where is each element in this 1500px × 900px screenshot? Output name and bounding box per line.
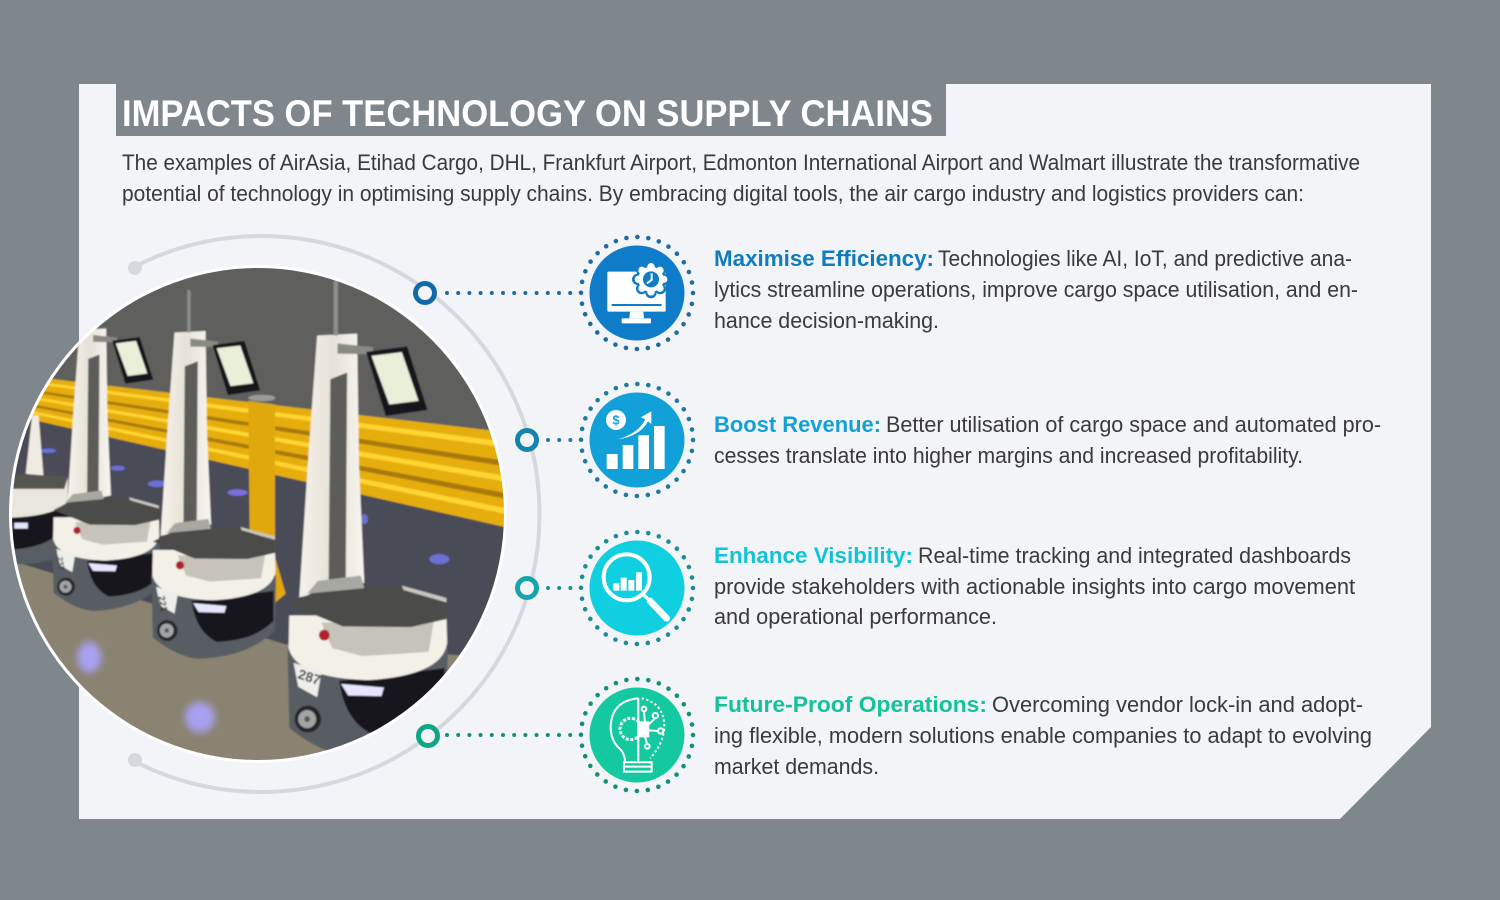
icon: tech light bulb	[581, 679, 693, 791]
text: boost revenue	[714, 412, 1381, 468]
infographic canvas	[9, 84, 1431, 819]
text: boost revenue: Boost Revenue:	[714, 412, 881, 437]
text: maximise efficiency	[714, 246, 1358, 333]
connector 4	[418, 726, 580, 746]
text: maximise efficiency: Maximise Efficiency:	[714, 246, 934, 271]
icon: magnifier	[581, 532, 693, 644]
connector 1	[416, 284, 580, 302]
text: future-proof operations: market demands.	[714, 754, 879, 779]
text: boost revenue: Better utilisation of cargo space and automated pro-	[886, 412, 1381, 437]
text: enhance visibility	[714, 543, 1356, 629]
icon: monitor with gear	[581, 237, 693, 349]
intro text: potential of technology in optimising supply chains. By embracing digital tools, the air cargo industry and logistics providers can:	[122, 181, 1304, 206]
text: future-proof operations: Overcoming vendor lock-in and adopt-	[992, 692, 1363, 717]
text: enhance visibility: and operational performance.	[714, 604, 997, 629]
panel	[79, 84, 1431, 819]
title: IMPACTS OF TECHNOLOGY ON SUPPLY CHAINS	[122, 93, 933, 134]
photo: robots in warehouse	[0, 263, 518, 775]
text: enhance visibility: Enhance Visibility:	[714, 543, 913, 568]
text: maximise efficiency: hance decision-making.	[714, 308, 939, 333]
distant robot	[12, 414, 69, 564]
text: future-proof operations	[714, 692, 1372, 779]
robot middle	[151, 290, 276, 659]
intro text	[122, 150, 1360, 206]
robot front	[287, 281, 448, 755]
robot front: 287	[296, 666, 323, 688]
connector 2	[518, 430, 580, 450]
robot middle: 221	[156, 595, 169, 612]
text: future-proof operations: Future-Proof Operations:	[714, 692, 987, 717]
text: enhance visibility: provide stakeholders with actionable insights into cargo movement	[714, 574, 1356, 599]
text: future-proof operations: ing flexible, modern solutions enable companies to adapt to evolving	[714, 723, 1372, 748]
icon: revenue growth chart	[581, 384, 693, 496]
outer arc	[128, 236, 539, 792]
text: boost revenue: cesses translate into higher margins and increased profitability.	[714, 443, 1303, 468]
text: maximise efficiency: Technologies like AI, IoT, and predictive ana-	[938, 246, 1352, 271]
text: maximise efficiency: lytics streamline operations, improve cargo space utilisation, and en-	[714, 277, 1358, 302]
robot rear	[52, 293, 160, 611]
intro text: The examples of AirAsia, Etihad Cargo, DHL, Frankfurt Airport, Edmonton International Airport and Walmart illustrate the transformative	[122, 150, 1360, 175]
connector 3	[518, 578, 580, 598]
icon: revenue growth chart: $	[612, 414, 620, 428]
robot rear: 237	[55, 556, 66, 571]
text: enhance visibility: Real-time tracking and integrated dashboards	[918, 543, 1351, 568]
